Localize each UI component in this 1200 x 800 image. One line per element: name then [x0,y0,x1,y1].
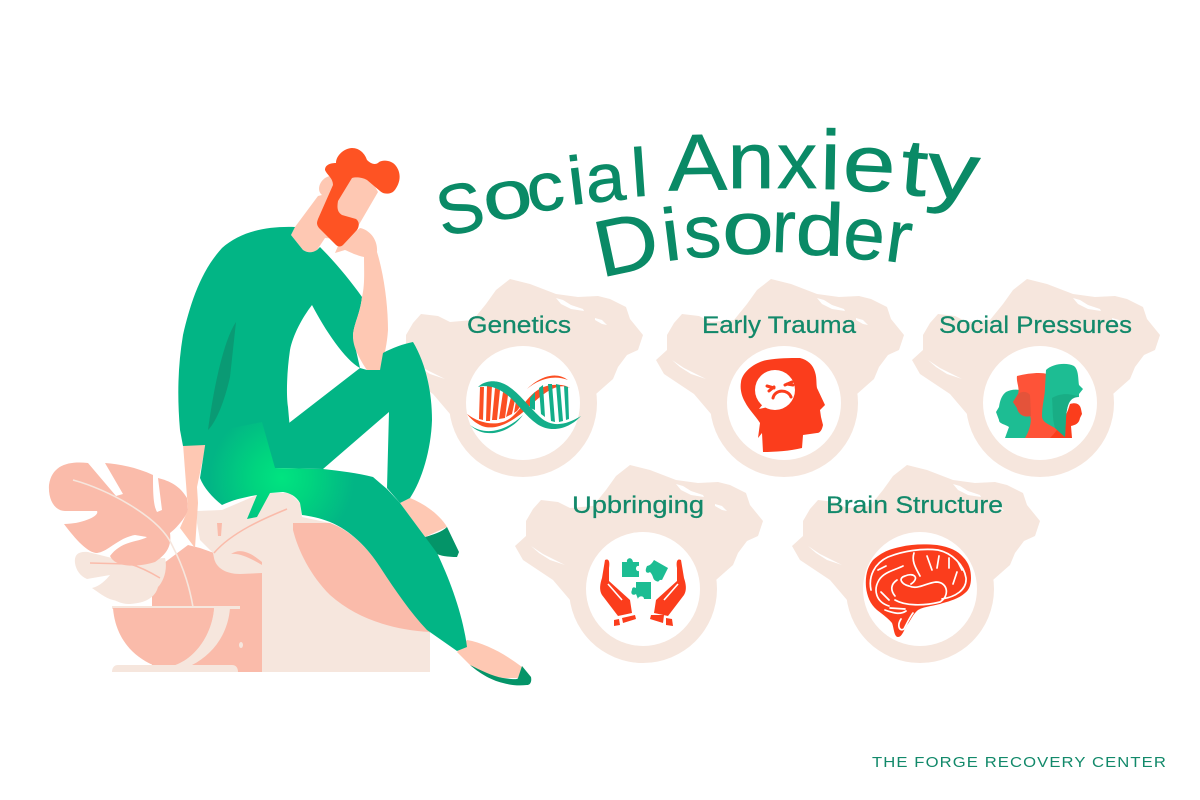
title: Social Anxiety Disorder: D [586,194,667,294]
title: Social Anxiety Disorder: r [771,186,797,269]
icon: DNA helix [467,375,581,433]
label: Brain Structure: Brain Structure [826,492,1003,519]
label: Early Trauma: Early Trauma [702,312,857,339]
title: Social Anxiety Disorder: A [667,117,728,208]
man: neck and face [291,170,378,252]
panel: Genetics [395,279,643,477]
title: Social Anxiety Disorder: S [429,166,491,252]
title: Social Anxiety Disorder: i [657,194,685,277]
man: front foot and shoe [457,640,522,678]
man: torso and sleeve [178,227,362,446]
box: salmon left side [152,545,262,672]
title: Social Anxiety Disorder: y [924,124,984,218]
man: lower body with highlight [200,422,467,651]
title: Social Anxiety Disorder: i [819,113,842,207]
label: Social Pressures: Social Pressures [939,312,1132,339]
box: salmon curved shape [293,523,430,633]
icon: head with sad face bubble [741,358,825,452]
title: Social Anxiety Disorder: n [728,117,774,206]
footer credit: THE FORGE RECOVERY CENTER [872,754,1167,771]
label: Upbringing: Upbringing [572,492,704,519]
title: Social Anxiety Disorder: e [841,117,898,210]
box: pale right side with leaf [197,493,430,672]
icon: hands holding puzzle pieces [600,558,686,626]
label: Genetics: Genetics [467,312,571,339]
man: left arm skin [180,444,206,548]
title: Social Anxiety Disorder: s [681,189,724,274]
monstera leaf: salmon [49,462,188,566]
man: raised knee leg [207,342,432,503]
title: Social Anxiety Disorder: e [840,190,889,277]
man: raised hand and forearm [335,228,388,370]
man: back leg and shoe [400,498,447,537]
title: Social Anxiety Disorder: t [897,122,932,213]
title: Social Anxiety Disorder [429,113,984,294]
illustration: plant, box and seated man [49,148,531,685]
panel: Upbringing [515,465,763,663]
monstera vein [73,480,193,607]
icon: brain [866,544,971,637]
monstera leaf: pale [75,552,166,604]
title: Social Anxiety Disorder: o [476,153,538,237]
icon: overlapping head silhouettes [996,364,1083,438]
panel: Social Pressures [912,279,1160,477]
title: Social Anxiety Disorder: a [582,138,628,217]
title: Social Anxiety Disorder: d [794,188,845,272]
title: Social Anxiety Disorder: x [777,116,817,205]
title: Social Anxiety Disorder: i [563,143,589,220]
title: Social Anxiety Disorder: c [521,147,569,228]
title: Social Anxiety Disorder: o [722,187,774,270]
title: Social Anxiety Disorder: l [628,135,650,212]
panel: Early Trauma [656,279,904,477]
title: Social Anxiety Disorder: r [882,194,918,280]
leaf vein and slits on pale leaf [214,509,287,553]
panel: Brain Structure [792,465,1040,663]
man: hair and beard [317,148,400,246]
bowl [112,606,243,672]
man: dark sleeve fold [208,322,236,430]
